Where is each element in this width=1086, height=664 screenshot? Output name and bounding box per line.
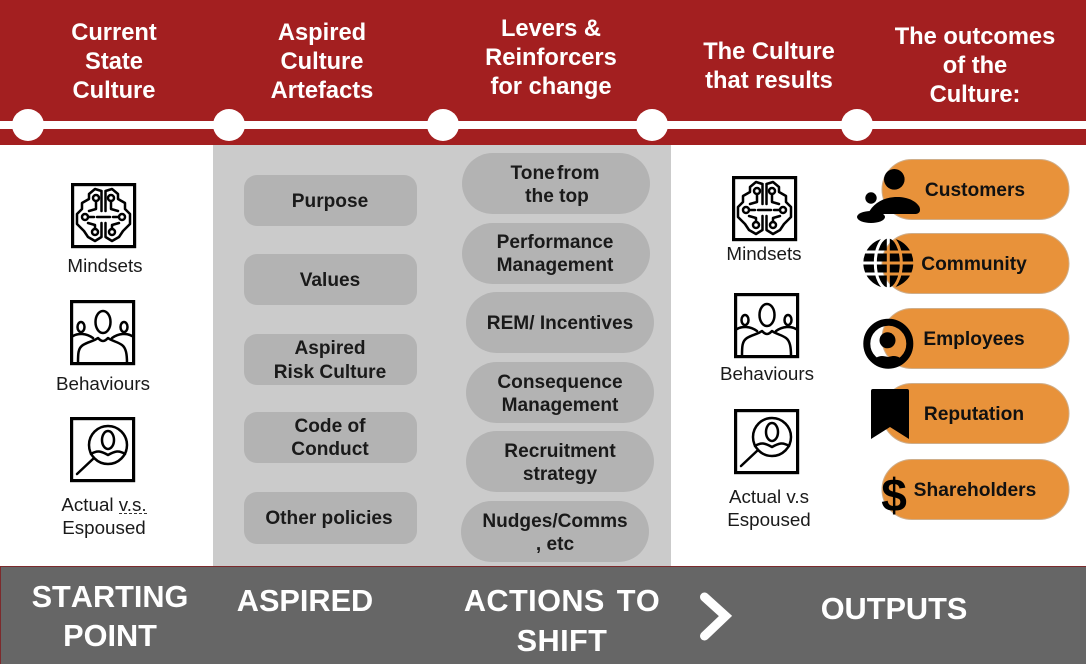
pill: consequence management: Consequence (497, 372, 623, 393)
label: outputs: OUTPUTS (821, 591, 967, 626)
icon: employee badge (867, 322, 910, 365)
pill: values (244, 254, 417, 305)
icon: bookmark (871, 389, 909, 439)
pill: purpose (244, 175, 417, 226)
pill: code of conduct: Code of (294, 416, 366, 437)
pill: nudges comms: Nudges/Comms (482, 511, 628, 532)
heading: levers and reinforcers: for change (490, 74, 612, 100)
pill: shareholders (882, 460, 1069, 520)
pill: aspired risk culture: Aspired (294, 338, 366, 359)
label: behaviours: Behaviours (720, 363, 814, 384)
panel: aspired artefacts and levers (213, 145, 671, 566)
arrow: chevron (704, 597, 726, 636)
label: mindsets: Mindsets (67, 255, 143, 276)
pill: reputation (882, 384, 1069, 444)
icon: brain (73, 185, 135, 247)
heading: aspired culture artefacts: Artefacts (271, 78, 373, 104)
pill: aspired risk culture (244, 334, 417, 385)
icon: brain (734, 178, 796, 240)
pill: community: Community (921, 254, 1027, 275)
pill: performance management: Performance (497, 232, 613, 253)
label: actions to shift: SHIFT (517, 623, 607, 658)
heading: current state culture: Culture (73, 78, 155, 104)
header band (0, 0, 1086, 145)
heading: current state culture: State (85, 49, 143, 75)
heading: levers and reinforcers: Levers & (501, 16, 601, 42)
pill: recruitment strategy: strategy (523, 464, 598, 485)
pill: recruitment strategy (466, 431, 654, 492)
heading: the culture that results: that results (705, 68, 833, 94)
heading: the outcomes of the culture: of the (943, 53, 1007, 79)
heading: the culture that results: The Culture (703, 39, 835, 65)
pill: tone from the top (462, 153, 650, 214)
pill: nudges comms (461, 501, 649, 562)
label: actual vs espoused: Actual v.s (729, 486, 809, 507)
pill: nudges comms: , etc (536, 534, 574, 555)
heading: the outcomes of the culture: Culture: (930, 82, 1020, 108)
pill: purpose: Purpose (292, 191, 368, 212)
pill: reputation: Reputation (924, 404, 1024, 425)
label: starting point: POINT (63, 618, 157, 653)
icon: magnifier person (736, 411, 798, 473)
label: behaviours: Behaviours (56, 373, 150, 394)
panel: outcomes (857, 160, 1069, 521)
pill: values: Values (300, 270, 360, 291)
pill: performance management: Management (497, 255, 614, 276)
heading: aspired culture artefacts: Aspired (278, 20, 366, 46)
icon: dollar: $ (881, 469, 907, 521)
pill: rem incentives: REM/ Incentives (487, 313, 633, 334)
label: actual vs espoused: Actual v.s. (61, 494, 147, 515)
pill: customers: Customers (925, 180, 1025, 201)
pill: consequence management: Management (502, 395, 619, 416)
heading: levers and reinforcers: Reinforcers (485, 45, 617, 71)
pill: tone from the top: Tone from (511, 163, 599, 184)
pill: other policies (244, 492, 417, 544)
pill: consequence management (466, 362, 654, 423)
icon: customers (857, 169, 920, 223)
label: actions to shift: ACTIONS TO (464, 583, 660, 618)
panel: resulting culture (720, 178, 814, 530)
pill: shareholders: Shareholders (914, 480, 1036, 501)
pill: employees (882, 308, 1069, 368)
icon: magnifier person (72, 419, 134, 481)
pill: tone from the top: the top (525, 186, 589, 207)
heading: current state culture: Current (71, 20, 157, 46)
pill: customers (882, 160, 1069, 220)
pill: performance management (462, 223, 650, 284)
pill: rem incentives (466, 292, 654, 353)
pill: other policies: Other policies (265, 508, 393, 529)
label: starting point: STARTING (32, 579, 188, 614)
pill: recruitment strategy: Recruitment (504, 441, 616, 462)
icon: globe (862, 237, 914, 289)
label: aspired: ASPIRED (237, 583, 373, 618)
pill: aspired risk culture: Risk Culture (274, 362, 386, 383)
icon: behaviours (72, 302, 134, 364)
label: mindsets: Mindsets (726, 243, 802, 264)
heading: aspired culture artefacts: Culture (281, 49, 363, 75)
icon: behaviours (736, 295, 798, 357)
pill: code of conduct: Conduct (291, 439, 369, 460)
footer band (0, 566, 1086, 664)
label: actual vs espoused: Espoused (727, 509, 811, 530)
timeline (0, 109, 1086, 141)
heading: the outcomes of the culture: The outcomes (895, 24, 1055, 50)
pill: code of conduct (244, 412, 417, 463)
pill: community (882, 234, 1069, 294)
label: actual vs espoused: Espoused (62, 517, 146, 538)
label: actual vs espoused (61, 494, 147, 538)
pill: employees: Employees (923, 329, 1025, 350)
panel: current state (56, 185, 150, 538)
